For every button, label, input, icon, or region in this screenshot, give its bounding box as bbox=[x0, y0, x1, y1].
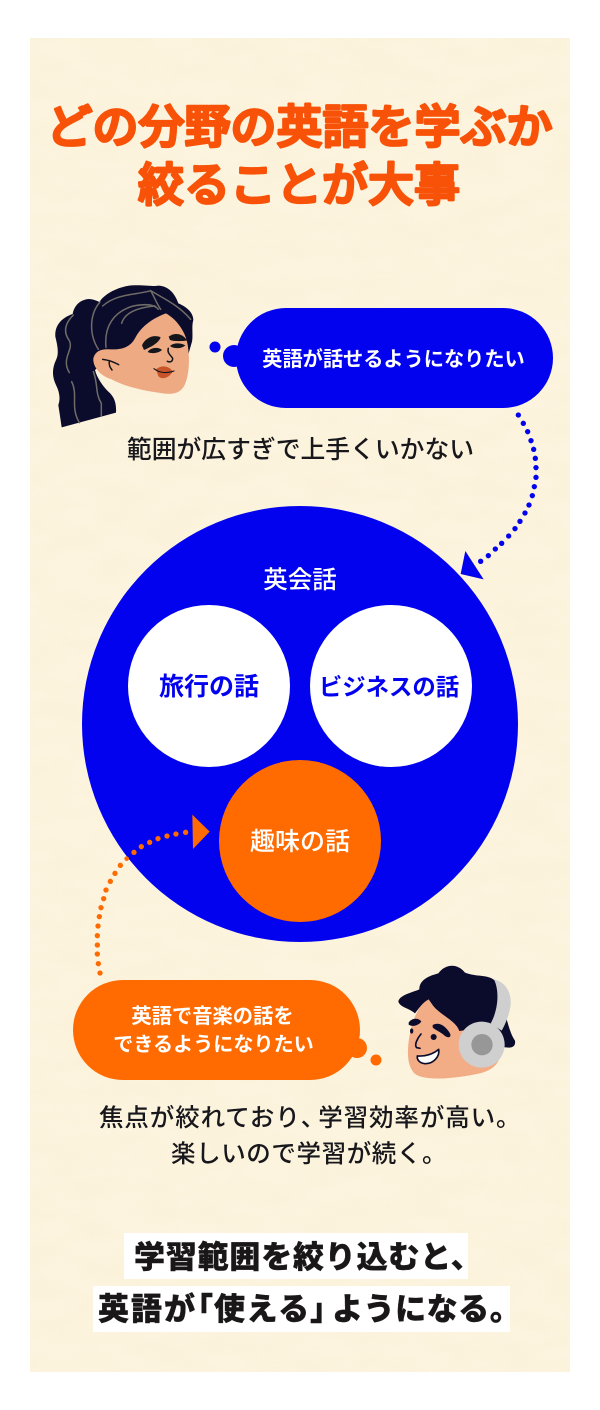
circle label: travel: 旅行の話 bbox=[159, 673, 259, 701]
conclusion line 1: 学習範囲を絞り込むと、 bbox=[134, 1240, 483, 1275]
orange dotted arrow bbox=[95, 815, 210, 976]
white circle: travel bbox=[128, 605, 290, 767]
bubble text: want to talk about music bbox=[113, 1005, 314, 1056]
result text bbox=[99, 1104, 521, 1168]
title bbox=[46, 101, 552, 211]
icon: man with headphones bbox=[398, 966, 515, 1079]
white circle: business bbox=[310, 605, 472, 767]
circle label: business: ビジネスの話 bbox=[319, 674, 459, 700]
result text: 焦点が絞れており、学習効率が高い。 bbox=[99, 1105, 521, 1132]
blue dotted arrow bbox=[461, 412, 539, 579]
circle label: conversation: 英会話 bbox=[263, 567, 337, 594]
title: どの分野の英語を学ぶか bbox=[46, 101, 552, 153]
circle label: hobby: 趣味の話 bbox=[250, 828, 350, 856]
bubble text: want to talk about music: 英語で音楽の話を bbox=[131, 1006, 294, 1028]
result text: 楽しいので学習が続く。 bbox=[171, 1141, 447, 1168]
icon: woman with dark wavy hair bbox=[53, 285, 193, 427]
orange circle: hobby bbox=[219, 760, 381, 922]
bubble text: want to talk about music: できるようになりたい bbox=[113, 1034, 314, 1056]
problem text: 範囲が広すぎで上手くいかない bbox=[127, 437, 474, 464]
title: 絞ることが大事 bbox=[138, 159, 460, 211]
large blue circle: conversation bbox=[82, 506, 518, 942]
bubble text: want to speak English: 英語が話せるようになりたい bbox=[262, 349, 525, 371]
conclusion line 2: 英語が「使える」ようになる。 bbox=[98, 1292, 505, 1327]
blue speech bubble bbox=[210, 308, 553, 408]
orange speech bubble bbox=[73, 980, 382, 1080]
